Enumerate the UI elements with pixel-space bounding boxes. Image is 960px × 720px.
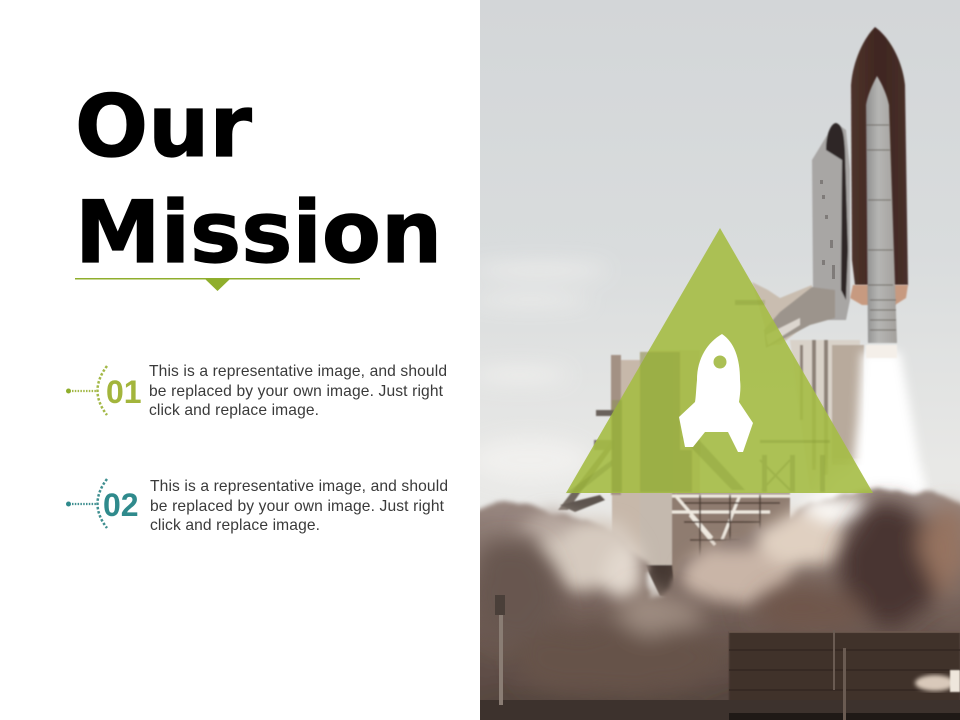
- text block 01: This is a representative image, and should: [149, 363, 447, 380]
- number 02: 02: [103, 487, 139, 523]
- solid rocket booster: [866, 76, 897, 343]
- panel: white background: [0, 0, 480, 720]
- icon: white rocket: [679, 334, 753, 452]
- text block 02: be replaced by your own image. Just right: [150, 498, 445, 515]
- title underline with pointer: [75, 278, 360, 291]
- service structure: [752, 282, 812, 345]
- text block 01: click and replace image.: [149, 402, 319, 419]
- text block 02: This is a representative image, and should: [150, 478, 448, 495]
- text block 02: click and replace image.: [150, 517, 320, 534]
- text block 02: [150, 478, 448, 534]
- orbiter: [773, 122, 851, 339]
- icon: green dotted connector: [66, 366, 107, 415]
- number 01: 01: [106, 374, 142, 410]
- sky: [480, 0, 960, 595]
- item 01: [66, 363, 447, 419]
- ground structures: [480, 595, 960, 720]
- title: Our Mission: Our: [75, 77, 252, 177]
- green translucent triangle: [566, 228, 873, 493]
- text block 01: be replaced by your own image. Just right: [149, 383, 444, 400]
- title: Our Mission: [75, 77, 442, 283]
- external tank: [851, 27, 908, 285]
- tower silhouette seen through triangle: [566, 300, 830, 493]
- smoke clouds: [470, 490, 960, 720]
- title: Our Mission: Mission: [75, 183, 442, 283]
- panel: rocket launch photo: [470, 0, 960, 720]
- text block 01: [149, 363, 447, 419]
- icon: teal dotted connector: [66, 479, 107, 528]
- item 02: [66, 478, 448, 534]
- launch tower: [558, 282, 864, 600]
- exhaust plume: [824, 344, 928, 496]
